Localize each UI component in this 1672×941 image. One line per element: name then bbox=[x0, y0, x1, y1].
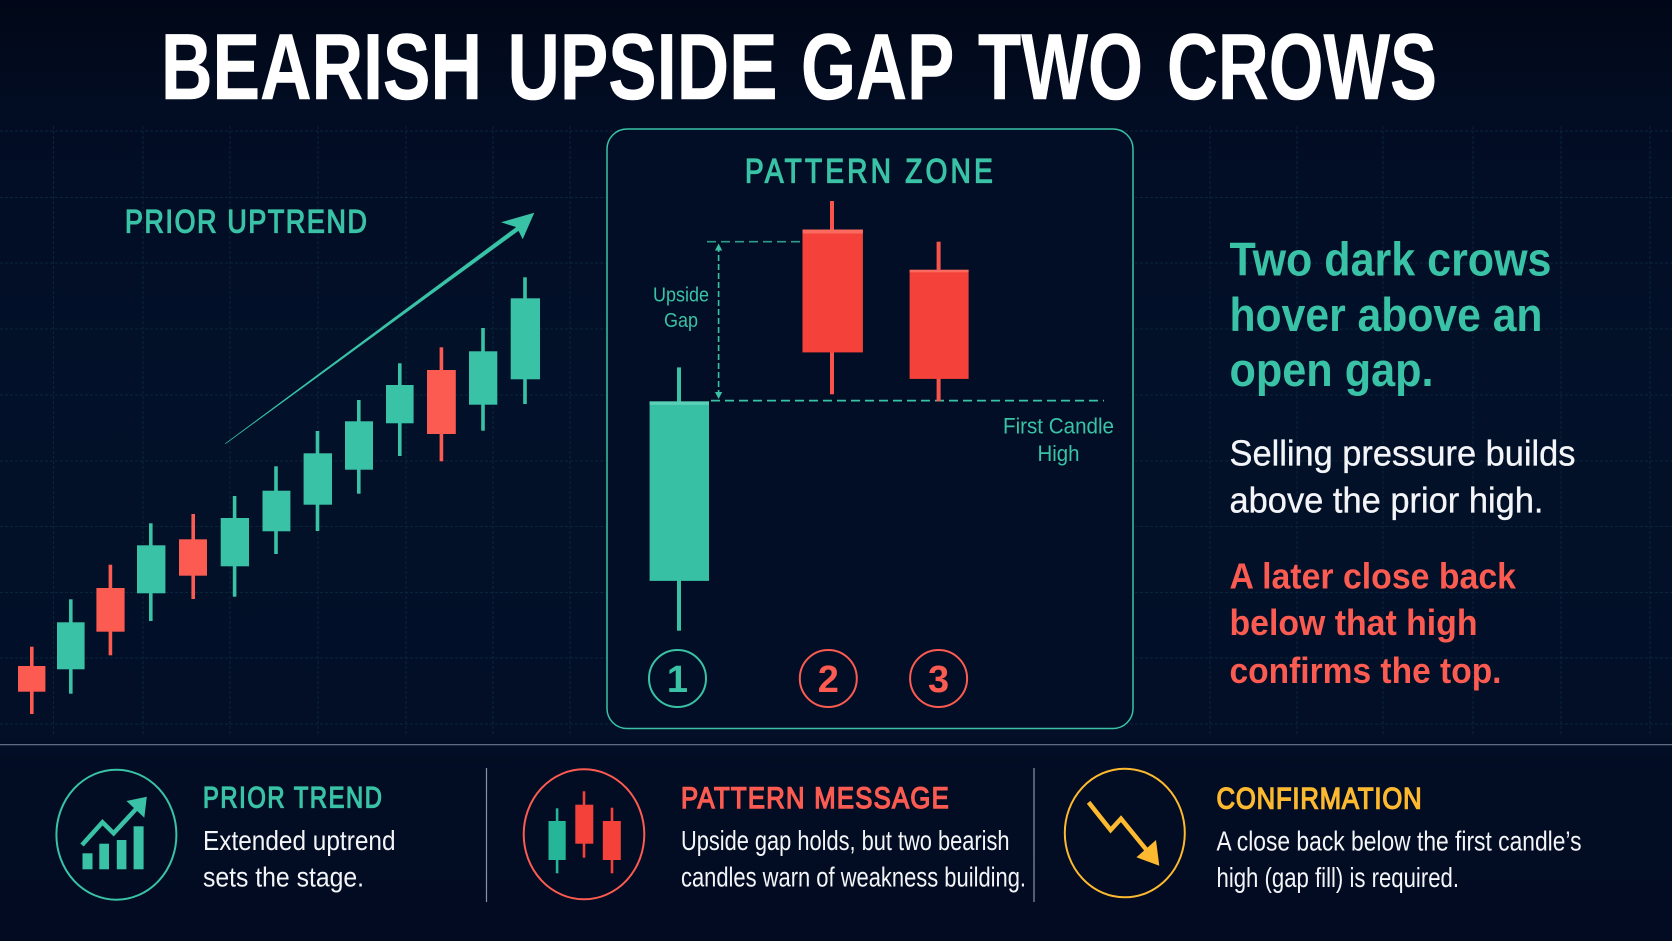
text block: later close confirms: confirms the top. bbox=[1230, 650, 1502, 691]
description: pattern message: Upside gap holds, but two bearish bbox=[681, 825, 1010, 856]
text block: two dark crows bbox=[1230, 232, 1552, 396]
text block: selling pressure bbox=[1230, 433, 1576, 521]
text block: two dark crows: Two dark crows bbox=[1230, 232, 1552, 286]
candle 12 bbox=[469, 328, 497, 431]
candle 1 bbox=[18, 647, 45, 714]
heading: confirmation: CONFIRMATION bbox=[1216, 782, 1422, 816]
icon: three candles bbox=[524, 769, 644, 899]
text block: later close confirms bbox=[1230, 555, 1517, 691]
text block: selling pressure: above the prior high. bbox=[1230, 480, 1544, 521]
description: confirmation: high (gap fill) is required. bbox=[1216, 862, 1459, 893]
first candle high dashed line bbox=[711, 400, 1104, 402]
description: prior trend: sets the stage. bbox=[203, 862, 364, 893]
icon: falling arrow bbox=[1065, 769, 1185, 897]
title: BEARISH bbox=[161, 14, 482, 119]
candle 4 bbox=[137, 523, 165, 621]
label: first candle high bbox=[1003, 413, 1114, 466]
footer item: confirmation bbox=[1065, 769, 1582, 897]
description: confirmation bbox=[1216, 826, 1582, 893]
description: confirmation: A close back below the first candle’s bbox=[1216, 826, 1582, 856]
number badge 2 bbox=[800, 650, 857, 707]
title: UPSIDE bbox=[508, 14, 778, 119]
number badge 3: 3 bbox=[928, 659, 949, 701]
candle 10 bbox=[386, 363, 414, 456]
candle 5 bbox=[179, 514, 207, 599]
text block: later close confirms: A later close back bbox=[1230, 555, 1517, 596]
text block: two dark crows: open gap. bbox=[1230, 343, 1434, 396]
arrow: prior uptrend direction bbox=[225, 213, 534, 444]
heading: pattern zone: PATTERN ZONE bbox=[745, 152, 996, 190]
candle 2 bbox=[57, 599, 85, 694]
number badge 2: 2 bbox=[818, 659, 839, 701]
candle 1: green bbox=[650, 367, 709, 631]
description: prior trend: Extended uptrend bbox=[203, 825, 396, 856]
label: first candle high: High bbox=[1038, 441, 1080, 466]
candle 3 bbox=[96, 565, 125, 655]
number badge 1: 1 bbox=[667, 659, 688, 701]
candle 9 bbox=[345, 400, 373, 494]
candle 3: red bbox=[910, 242, 969, 401]
panel: pattern zone bbox=[607, 129, 1133, 728]
heading: pattern message: PATTERN MESSAGE bbox=[681, 782, 950, 815]
candle 6 bbox=[221, 496, 249, 597]
footer item: pattern message bbox=[524, 769, 1026, 899]
number badge 3 bbox=[910, 650, 967, 707]
footer item: prior trend bbox=[56, 770, 396, 900]
number badge 1 bbox=[649, 650, 706, 707]
text block: later close confirms: below that high bbox=[1230, 602, 1478, 643]
chart: prior uptrend candlesticks bbox=[18, 277, 540, 714]
text block: selling pressure: Selling pressure builds bbox=[1230, 433, 1576, 474]
title: GAP bbox=[801, 14, 953, 119]
label: upside gap bbox=[653, 284, 709, 332]
upper gap dashed line bbox=[707, 241, 802, 243]
description: pattern message: candles warn of weakness building. bbox=[681, 862, 1026, 893]
candle 11 bbox=[427, 347, 456, 461]
title: CROWS bbox=[1167, 14, 1437, 119]
description: pattern message bbox=[681, 825, 1026, 893]
label: first candle high: First Candle bbox=[1003, 413, 1114, 438]
heading: prior uptrend: PRIOR UPTREND bbox=[125, 204, 368, 240]
title: TWO bbox=[978, 14, 1143, 119]
double arrow: gap height bbox=[715, 244, 722, 399]
label: upside gap: Gap bbox=[664, 309, 698, 332]
label: upside gap: Upside bbox=[653, 284, 709, 306]
candle 13 bbox=[511, 277, 540, 404]
heading: prior trend: PRIOR TREND bbox=[203, 781, 384, 814]
text block: two dark crows: hover above an bbox=[1230, 288, 1542, 341]
candle 2: red bbox=[802, 201, 863, 394]
icon: rising chart bbox=[56, 770, 176, 900]
candle 8 bbox=[304, 431, 332, 531]
candle 7 bbox=[262, 466, 290, 554]
description: prior trend bbox=[203, 825, 396, 893]
